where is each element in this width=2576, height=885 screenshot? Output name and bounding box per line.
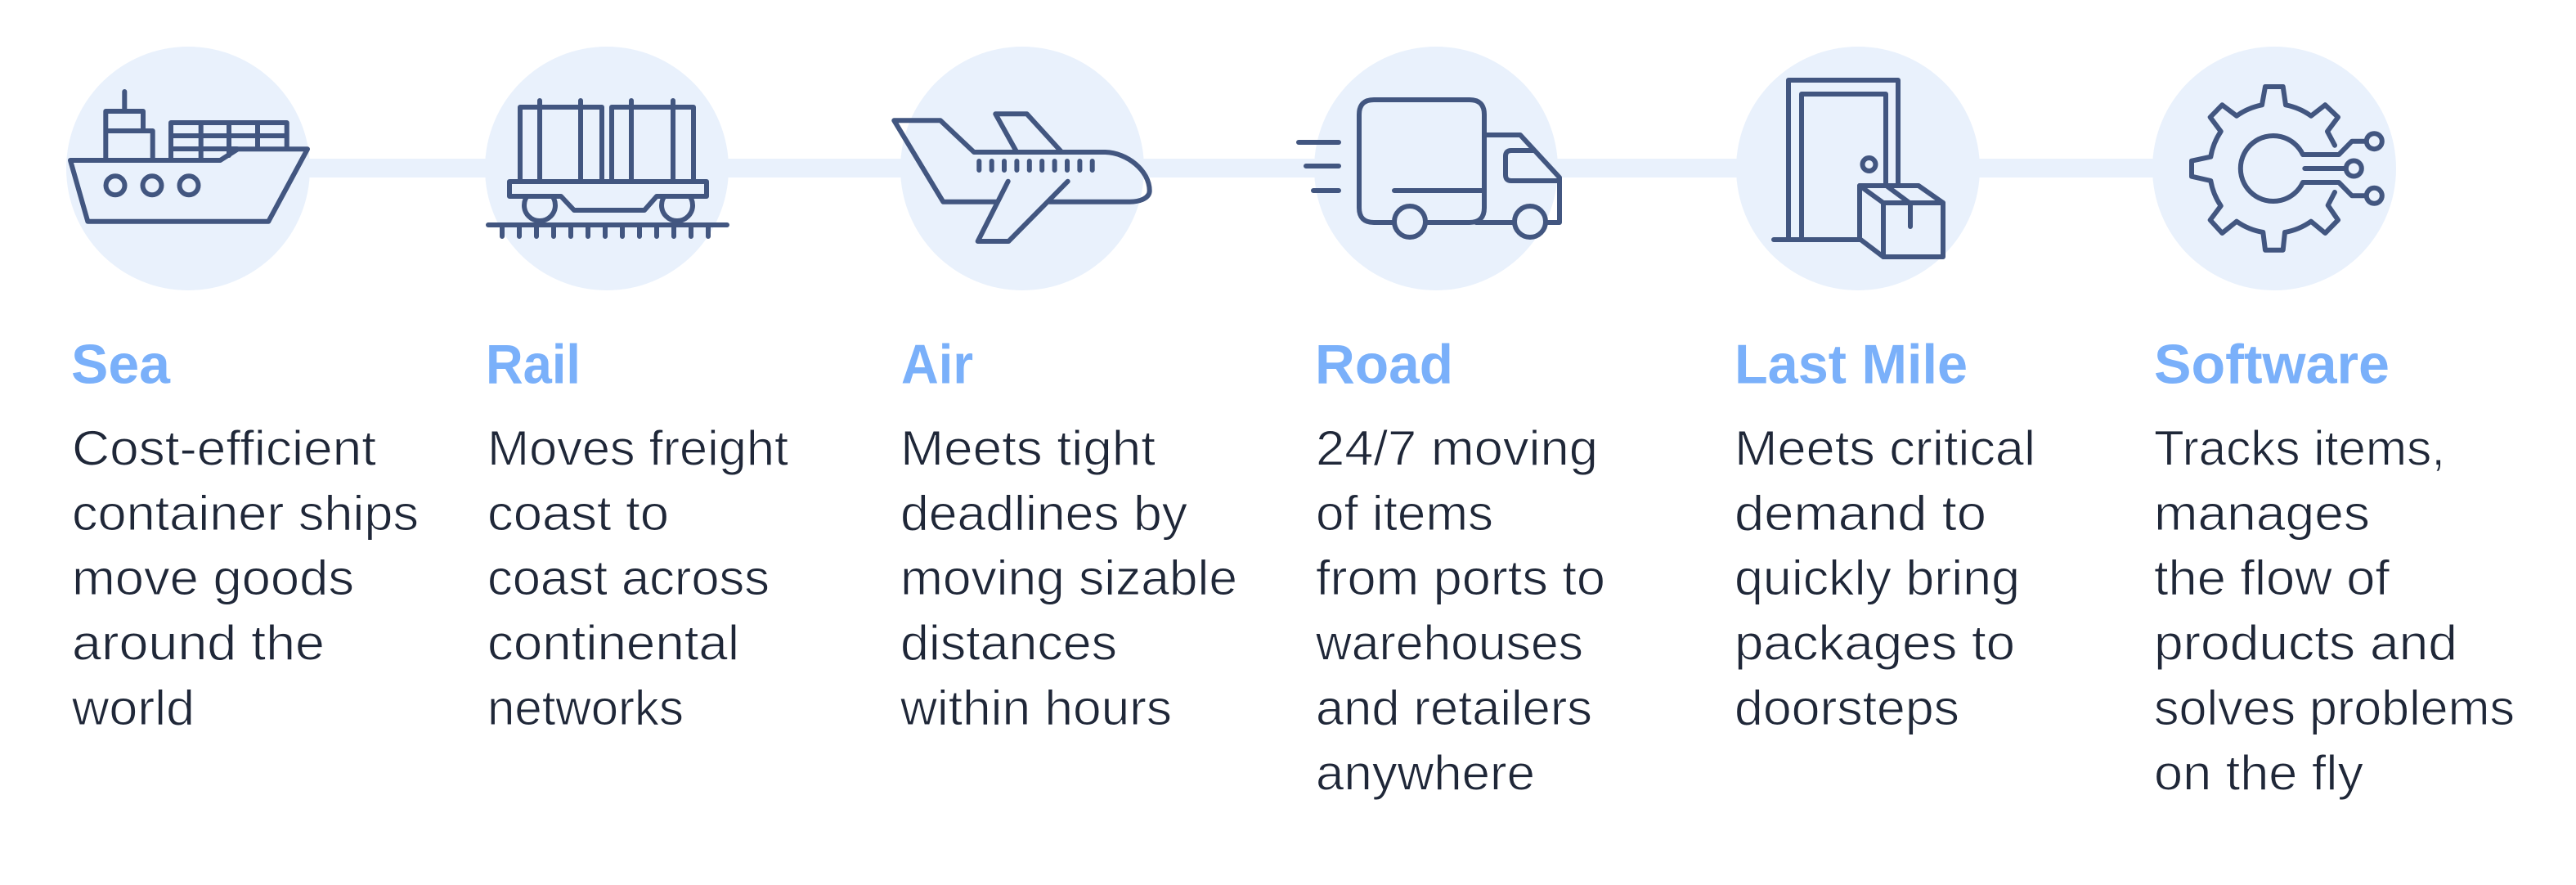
heading: Rail: Rail bbox=[486, 334, 581, 396]
description: road: and retailers bbox=[1316, 681, 1592, 735]
description: air: moving sizable bbox=[900, 550, 1237, 605]
icon circle: air bbox=[900, 47, 1144, 290]
icon: container ship bbox=[70, 92, 307, 222]
description: software bbox=[2154, 420, 2515, 800]
description: sea: container ships bbox=[72, 486, 419, 541]
description: software: Tracks items, bbox=[2154, 420, 2445, 476]
panel: last mile bbox=[1735, 47, 2035, 735]
description: last mile: packages to bbox=[1735, 615, 2015, 671]
description: last mile: quickly bring bbox=[1735, 550, 2020, 605]
description: last mile: Meets critical bbox=[1735, 420, 2035, 476]
description: road: 24/7 moving bbox=[1316, 420, 1598, 476]
icon circle: sea bbox=[66, 47, 310, 290]
description: sea: Cost-efficient bbox=[72, 420, 376, 476]
description: last mile: doorsteps bbox=[1735, 681, 1959, 735]
description: air: distances bbox=[900, 615, 1117, 671]
heading: Software: Software bbox=[2154, 334, 2390, 396]
description: software: solves problems bbox=[2154, 681, 2515, 735]
icon: door with parcel bbox=[1774, 80, 1943, 257]
description: air bbox=[900, 420, 1237, 735]
heading: Last Mile: Last Mile bbox=[1735, 334, 1968, 396]
description: rail: coast to bbox=[487, 486, 669, 541]
heading: Road: Road bbox=[1315, 334, 1453, 396]
icon: delivery truck bbox=[1299, 100, 1560, 237]
description: rail: Moves freight bbox=[487, 420, 788, 476]
description: last mile bbox=[1735, 420, 2035, 735]
description: software: products and bbox=[2154, 615, 2457, 671]
description: rail bbox=[487, 420, 788, 735]
description: last mile: demand to bbox=[1735, 486, 1986, 541]
description: rail: networks bbox=[487, 681, 684, 735]
description: road: from ports to bbox=[1316, 550, 1605, 605]
description: sea bbox=[71, 420, 419, 735]
icon circle: last mile bbox=[1736, 47, 1980, 290]
description: road bbox=[1315, 420, 1605, 800]
description: software: manages bbox=[2154, 486, 2370, 541]
icon: airplane bbox=[894, 114, 1150, 241]
panel: sea bbox=[66, 47, 419, 735]
icon circle: software bbox=[2152, 47, 2396, 290]
panel: road bbox=[1299, 47, 1605, 800]
description: road: of items bbox=[1316, 486, 1493, 541]
description: road: anywhere bbox=[1316, 746, 1535, 800]
description: software: the flow of bbox=[2154, 550, 2390, 605]
panel: software bbox=[2152, 47, 2515, 800]
heading: Air: Air bbox=[901, 334, 973, 396]
connector line bbox=[188, 159, 2274, 177]
description: air: deadlines by bbox=[900, 486, 1187, 541]
icon: rail freight car bbox=[488, 101, 727, 236]
icon circle: road bbox=[1314, 47, 1558, 290]
description: road: warehouses bbox=[1315, 615, 1583, 671]
description: sea: around the bbox=[72, 615, 325, 671]
panel: rail bbox=[485, 47, 788, 735]
icon circle: rail bbox=[485, 47, 729, 290]
description: sea: world bbox=[71, 681, 195, 735]
description: air: within hours bbox=[900, 681, 1172, 735]
icon: gear with circuit bbox=[2192, 87, 2382, 250]
heading: Sea: Sea bbox=[71, 334, 171, 396]
panel: air bbox=[894, 47, 1237, 735]
description: software: on the fly bbox=[2154, 746, 2363, 800]
description: sea: move goods bbox=[72, 550, 354, 605]
description: rail: continental bbox=[487, 615, 739, 671]
description: air: Meets tight bbox=[900, 420, 1156, 476]
description: rail: coast across bbox=[487, 550, 770, 605]
